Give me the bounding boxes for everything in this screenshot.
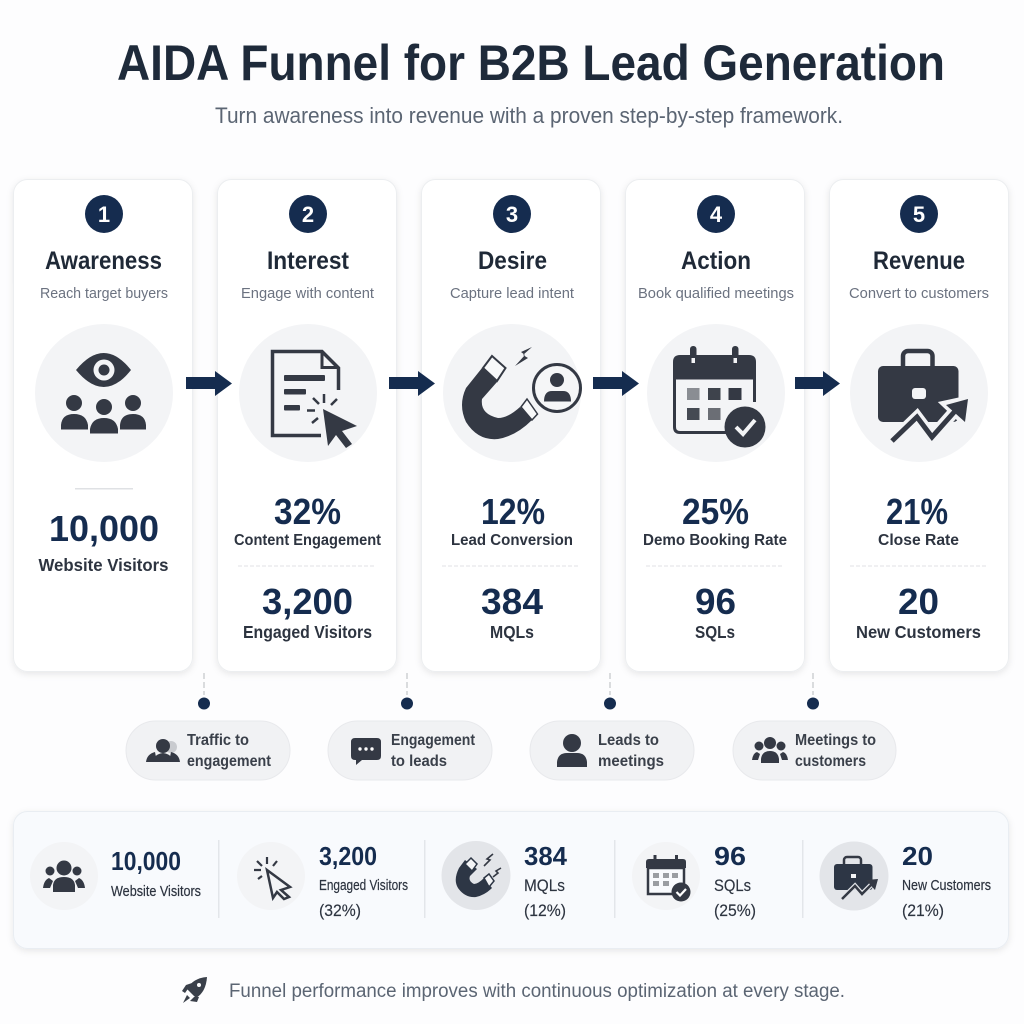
pill: meetings to customers: [733, 721, 896, 780]
panel: action: [626, 180, 804, 672]
summary: engaged visitors: (32%): [319, 901, 361, 920]
step number 3: 3: [506, 202, 518, 227]
stat: content engagement: [234, 491, 382, 549]
heading: awareness: Awareness: [45, 247, 162, 275]
title: AIDA Funnel for B2B Lead Generation: [117, 35, 945, 91]
arrow: action to revenue: [795, 371, 840, 396]
icon: calendar with check: [647, 324, 785, 462]
stat: close rate: [878, 491, 959, 549]
label: Traffic to: [187, 732, 249, 749]
pill: engagement to leads: [328, 721, 492, 780]
stat: sqls: [695, 581, 736, 642]
panel: funnel summary: [14, 812, 1008, 948]
stat: new customers: 20: [898, 581, 939, 622]
summary: new customers: (21%): [902, 901, 944, 920]
description: Book qualified meetings: [638, 286, 794, 302]
summary: mqls: 384: [524, 841, 568, 871]
label: meetings: [598, 753, 664, 770]
label: [187, 732, 272, 770]
summary: website visitors: [30, 842, 201, 910]
arrow: awareness to interest: [186, 371, 232, 396]
summary: mqls: (12%): [524, 901, 566, 920]
summary: website visitors: 10,000: [111, 846, 181, 876]
label: engagement: [187, 753, 272, 770]
stat: mqls: MQLs: [490, 622, 534, 642]
label: [391, 732, 476, 770]
step number 4: 4: [710, 202, 723, 227]
stat: engaged visitors: [243, 581, 372, 642]
stat: lead conversion: 12%: [481, 491, 545, 532]
step number 1: [85, 195, 123, 233]
stat: website visitors: 10,000: [49, 508, 159, 549]
icon: group: [752, 737, 788, 763]
stat: mqls: 384: [481, 581, 543, 622]
heading: action: Action: [681, 247, 751, 275]
connector 4: [807, 673, 819, 710]
connector 2: [401, 673, 413, 710]
stat: sqls: 96: [695, 581, 736, 622]
panel: awareness: [14, 180, 192, 672]
step number 3: [493, 195, 531, 233]
stat: content engagement: 32%: [274, 491, 341, 532]
icon: briefcase and growth: [850, 324, 988, 462]
summary: sqls: SQLs: [714, 876, 751, 895]
stat: lead conversion: Lead Conversion: [451, 532, 573, 549]
stat: new customers: New Customers: [856, 622, 981, 642]
stat: engaged visitors: Engaged Visitors: [243, 622, 372, 642]
label: Meetings to: [795, 732, 876, 749]
summary: engaged visitors: [237, 841, 408, 920]
summary: mqls: MQLs: [524, 876, 565, 895]
stat: close rate: 21%: [886, 491, 948, 532]
icon: person: [557, 734, 587, 767]
pill: leads to meetings: [530, 721, 694, 780]
description: Reach target buyers: [40, 286, 168, 302]
summary: engaged visitors: Engaged Visitors: [319, 877, 408, 894]
panel: revenue: [830, 180, 1008, 672]
summary: engaged visitors: 3,200: [319, 841, 377, 871]
stat: sqls: SQLs: [695, 622, 735, 642]
stat: content engagement: Content Engagement: [234, 532, 382, 549]
summary: sqls: 96: [714, 841, 746, 871]
panel: desire: [422, 180, 600, 672]
arrow: interest to desire: [389, 371, 435, 396]
heading: interest: Interest: [267, 247, 350, 275]
stat: demo booking rate: [643, 491, 787, 549]
icon: chat bubble: [351, 738, 381, 765]
icon: rocket: [182, 977, 207, 1003]
pill: traffic to engagement: [126, 721, 290, 780]
label: Engagement: [391, 732, 476, 749]
stat: demo booking rate: 25%: [682, 491, 749, 532]
panel: interest: [218, 180, 396, 672]
icon: audience: [146, 739, 180, 762]
connector 3: [604, 673, 616, 710]
description: Capture lead intent: [450, 286, 574, 302]
label: to leads: [391, 753, 447, 770]
icon: eye over audience: [35, 324, 173, 462]
label: [598, 732, 664, 770]
summary: mqls: [442, 841, 568, 920]
step number 5: 5: [913, 202, 925, 227]
label: customers: [795, 753, 866, 770]
icon: magnet and person: [443, 324, 581, 462]
summary: new customers: [820, 841, 991, 920]
stat: mqls: [481, 581, 543, 642]
label: Leads to: [598, 732, 659, 749]
stat: close rate: Close Rate: [878, 532, 959, 549]
arrow: desire to action: [593, 371, 639, 396]
step number 4: [697, 195, 735, 233]
summary: website visitors: Website Visitors: [111, 883, 201, 900]
stat: website visitors: [38, 508, 169, 575]
stat: new customers: [856, 581, 981, 642]
description: Engage with content: [241, 286, 374, 302]
step number 1: 1: [98, 202, 110, 227]
connector 1: [198, 673, 210, 710]
summary: new customers: New Customers: [902, 877, 991, 894]
subtitle: Turn awareness into revenue with a proven step-by-step framework.: [215, 103, 843, 128]
icon: document and cursor: [239, 324, 377, 462]
summary: new customers: 20: [902, 841, 933, 871]
heading: revenue: Revenue: [873, 247, 965, 275]
summary: sqls: [632, 841, 756, 920]
stat: engaged visitors: 3,200: [262, 581, 353, 622]
description: Convert to customers: [849, 286, 989, 302]
stat: website visitors: Website Visitors: [38, 555, 169, 575]
footer note: Funnel performance improves with continuous optimization at every stage.: [229, 981, 845, 1002]
summary: sqls: (25%): [714, 901, 756, 920]
step number 2: [289, 195, 327, 233]
heading: desire: Desire: [478, 247, 547, 275]
stat: demo booking rate: Demo Booking Rate: [643, 532, 787, 549]
step number 5: [900, 195, 938, 233]
stat: lead conversion: [451, 491, 573, 549]
step number 2: 2: [302, 202, 314, 227]
label: [795, 732, 876, 770]
